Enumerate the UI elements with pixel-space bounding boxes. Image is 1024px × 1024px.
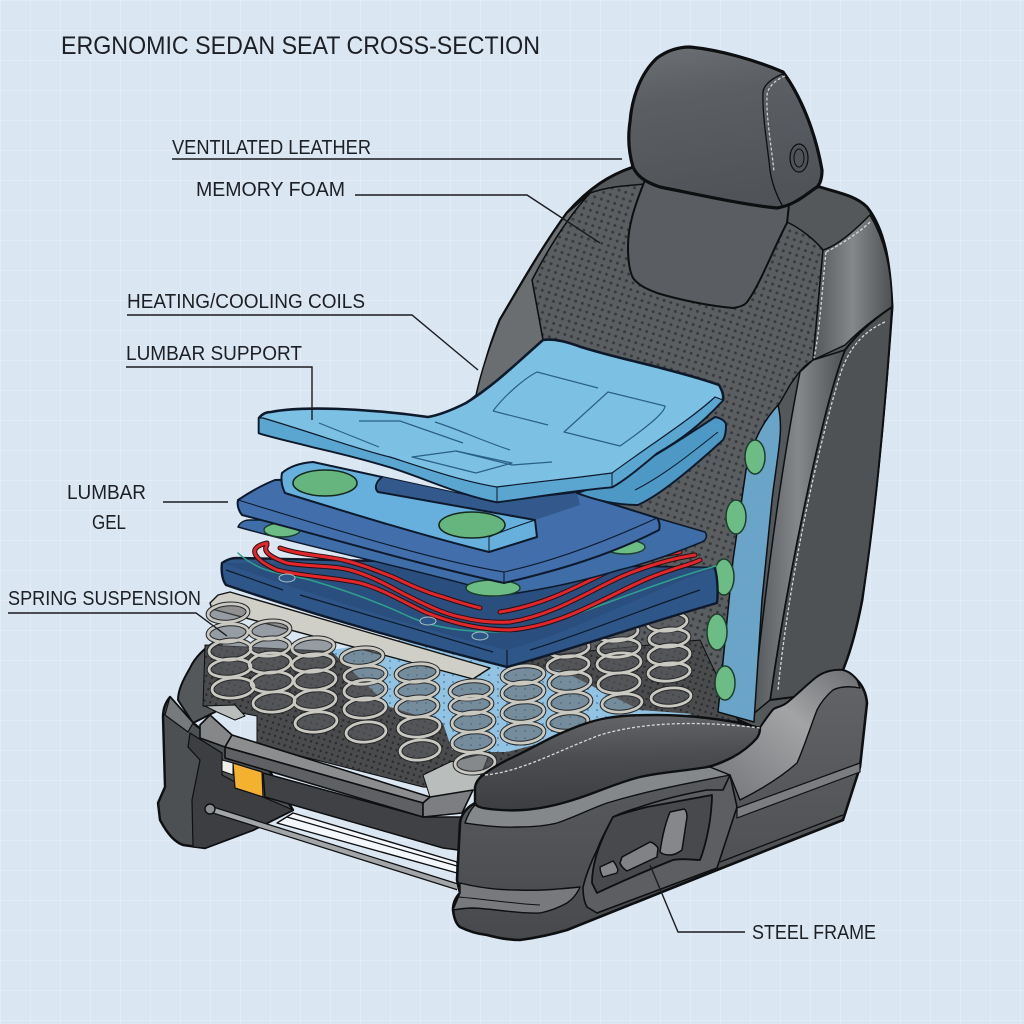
seat base frame (158, 670, 867, 940)
label: steel frame: STEEL FRAME (752, 922, 876, 944)
label: steel frame (650, 865, 876, 944)
right base housing (453, 670, 867, 940)
seat springs (207, 602, 692, 775)
steel rods (205, 804, 458, 887)
headrest post panel (628, 180, 790, 308)
frame top facet (165, 697, 193, 732)
left rear cushion (178, 643, 222, 723)
coil layer base plate (222, 543, 718, 667)
light deck plates (205, 705, 490, 797)
gel foam pad with green inserts (281, 462, 537, 552)
control switch: small (600, 861, 618, 877)
label: lumbar support: LUMBAR SUPPORT (126, 343, 302, 365)
label: heating/cooling coils: HEATING/COOLING COILS (127, 291, 365, 313)
control switch: wide (620, 842, 658, 871)
frame inner panel (188, 733, 293, 848)
label: lumbar gel: LUMBAR (67, 482, 146, 504)
label: lumbar support (126, 343, 312, 420)
label: heating/cooling coils (127, 291, 478, 370)
label: ventilated leather: VENTILATED LEATHER (172, 137, 371, 159)
control switch: tall (660, 809, 687, 855)
perforated seat deck (203, 640, 740, 790)
top memory foam cushion (259, 340, 726, 505)
label: memory foam (196, 179, 600, 243)
right side bolster (813, 215, 892, 360)
seat backrest (470, 47, 892, 770)
label: spring suspension: SPRING SUSPENSION (8, 588, 201, 610)
heating and cooling coils (238, 543, 716, 632)
left side bolster (475, 193, 590, 400)
label: memory foam: MEMORY FOAM (196, 179, 345, 201)
lumbar gel strip (718, 405, 780, 722)
lumbar green pads on strip (707, 440, 765, 700)
label: spring suspension (8, 588, 227, 636)
housing side stripe (710, 670, 860, 800)
front crossbeam (200, 715, 473, 817)
green spacer pads (264, 523, 645, 596)
blue padded deck (330, 640, 693, 752)
headrest (629, 47, 822, 208)
seat cushion bolster (475, 715, 760, 810)
rear frame side (158, 697, 293, 848)
backrest shell (475, 167, 892, 730)
label: lumbar gel (67, 482, 228, 534)
lower blue foam plate (238, 462, 706, 596)
title: ERGNOMIC SEDAN SEAT CROSS-SECTION (61, 32, 540, 60)
perforated centre panel (470, 184, 823, 770)
label: lumbar gel: GEL (92, 512, 126, 534)
seat pan underlay (178, 640, 740, 797)
lower housing (263, 773, 462, 850)
upper blue foam plate (238, 477, 660, 583)
seat controls panel (583, 775, 737, 913)
lower cushion sheet (577, 417, 726, 505)
housing light band (465, 767, 730, 827)
upper cushion sheet (259, 340, 723, 502)
housing lower strip (453, 883, 580, 913)
steel support plate (210, 592, 490, 679)
yellow actuator box (222, 760, 263, 797)
